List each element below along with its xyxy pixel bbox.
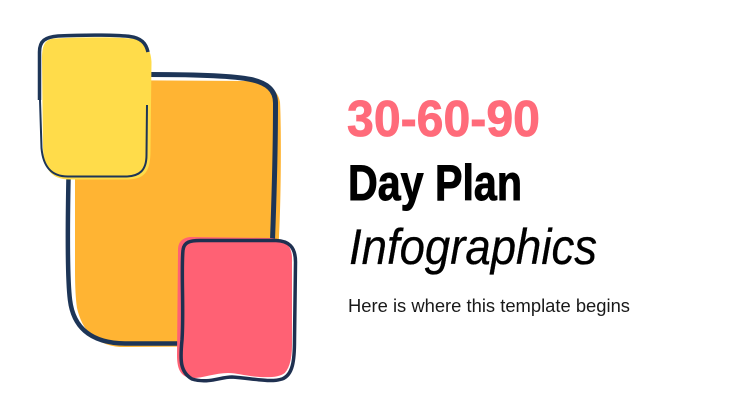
title: Day Plan: Day Plan — [348, 155, 522, 211]
title: Infographics: Infographics — [349, 219, 597, 275]
yellow rounded panel with navy outline — [40, 35, 152, 180]
orange rounded panel with navy outline — [68, 74, 281, 347]
title: 30-60-90: 30-60-90 — [347, 90, 540, 147]
red rounded panel with navy outline — [177, 237, 296, 381]
subtitle: Here is where this template begins — [348, 295, 630, 316]
